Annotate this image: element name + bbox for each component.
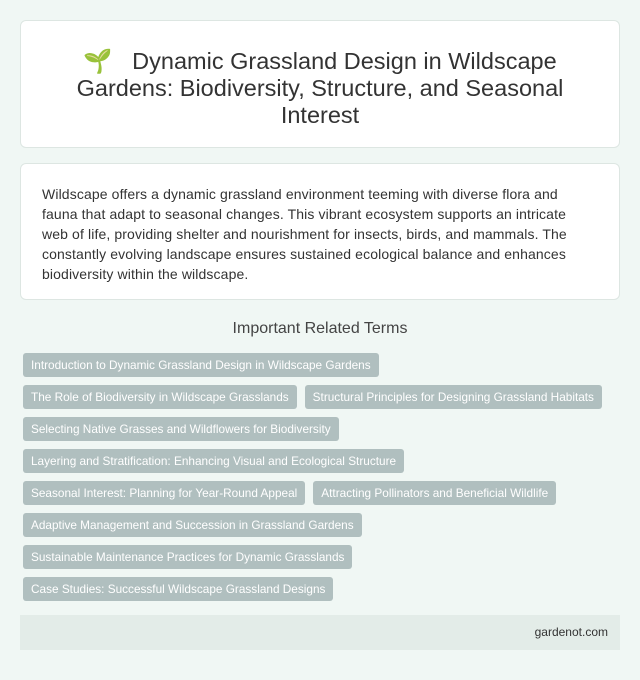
footer: gardenot.com [535, 625, 608, 639]
tag list: Adaptive Management and Succession in Grassland Gardens [31, 518, 354, 532]
tag list: Selecting Native Grasses and Wildflowers for Biodiversity [31, 422, 331, 436]
title card: 🌱 Dynamic Grassland Design in Wildscape Gardens: Biodiversity, Structure, and Seasonal Interest [77, 46, 563, 128]
tag list: The Role of Biodiversity in Wildscape Grasslands [31, 390, 289, 404]
tag list: Structural Principles for Designing Grassland Habitats [313, 390, 594, 404]
description panel [20, 163, 620, 300]
tag list: Case Studies: Successful Wildscape Grassland Designs [31, 582, 325, 596]
title card [20, 20, 620, 148]
tag list: Attracting Pollinators and Beneficial Wildlife [321, 486, 548, 500]
tag list [23, 353, 602, 601]
tag list: Sustainable Maintenance Practices for Dynamic Grasslands [31, 550, 344, 564]
heading: related terms: Important Related Terms [233, 320, 407, 337]
footer [20, 615, 620, 650]
tag list: Introduction to Dynamic Grassland Design in Wildscape Gardens [31, 358, 371, 372]
tag list: Layering and Stratification: Enhancing Visual and Ecological Structure [31, 454, 396, 468]
description panel: Wildscape offers a dynamic grassland environment teeming with diverse flora and fauna that adapt to seasonal changes. This vibrant ecosystem supports an intricate web of life, providing shelter and nourishment for insects, birds, and mammals. The constantly evolving landscape ensures sustained ecological balance and enhances biodiversity within the wildscape. [42, 186, 567, 282]
tag list: Seasonal Interest: Planning for Year-Round Appeal [31, 486, 297, 500]
